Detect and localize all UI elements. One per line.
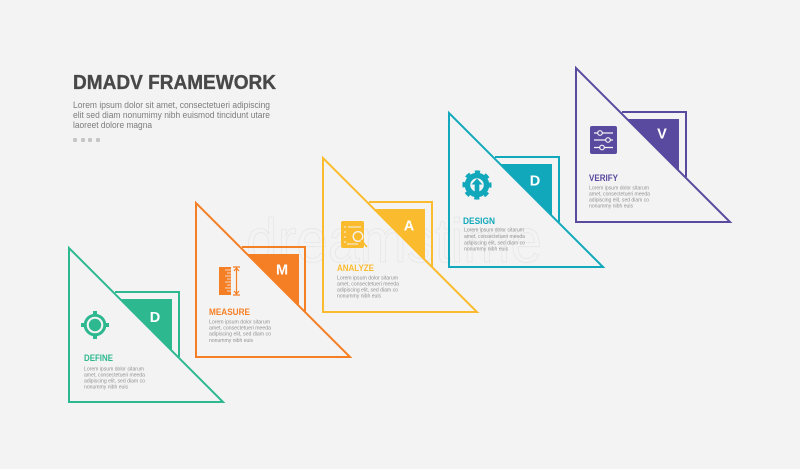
letter tab <box>374 209 425 260</box>
heading: DESIGN <box>463 216 495 226</box>
letter: D <box>150 310 160 326</box>
triangle outline <box>196 203 350 357</box>
body text: nonummy nibh euis <box>84 384 128 390</box>
triangle outline <box>323 158 477 312</box>
icon: gear with arrow <box>462 170 492 200</box>
heading: MEASURE <box>209 307 250 317</box>
letter: D <box>530 174 540 190</box>
pagination dots <box>73 138 100 142</box>
intro text: laoreet dolore magna <box>73 120 152 130</box>
body text <box>589 186 650 210</box>
heading: ANALYZE <box>337 263 374 273</box>
letter: V <box>657 126 667 142</box>
body text: amet, consectetueri meeda <box>84 372 145 378</box>
panel: verify <box>576 68 730 222</box>
icon: report with magnifier <box>341 221 367 248</box>
body text: amet, consectetueri meeda <box>209 326 271 332</box>
panel: define <box>69 248 223 402</box>
icon: ruler and arrow <box>219 267 240 295</box>
triangle outline <box>449 113 603 267</box>
body text: Lorem ipsum dolor sitarum <box>337 276 398 282</box>
body text: nonummy nibh euis <box>337 294 381 300</box>
body text: amet, consectetueri meeda <box>589 192 650 198</box>
watermark: dreamstime <box>246 207 542 276</box>
body text: nonummy nibh euis <box>209 338 253 344</box>
body text <box>464 228 525 252</box>
triangle outline <box>69 248 223 402</box>
body text: amet, consectetueri meeda <box>337 282 399 288</box>
back outline <box>622 112 686 177</box>
body text: adipiscing elit, sed diam co <box>464 240 525 246</box>
body text: nonummy nibh euis <box>589 204 633 210</box>
body text: Lorem ipsum dolor sitarum <box>589 186 649 192</box>
body text <box>84 366 145 390</box>
letter: M <box>276 262 288 278</box>
body text <box>209 320 271 344</box>
intro text: Lorem ipsum dolor sit amet, consectetueri adipiscing <box>73 100 270 110</box>
icon: target <box>81 311 109 339</box>
body text: adipiscing elit, sed diam co <box>209 332 271 338</box>
back outline <box>242 247 305 312</box>
back outline <box>369 202 432 267</box>
heading: VERIFY <box>589 173 618 183</box>
letter tab <box>627 119 679 171</box>
back outline <box>495 157 559 222</box>
panel: measure <box>196 203 350 357</box>
body text: nonummy nibh euis <box>464 246 508 252</box>
body text: adipiscing elit, sed diam co <box>589 198 649 204</box>
intro text: elit sed diam nonumimy nibh euismod tincidunt utare <box>73 110 270 120</box>
icon: sliders <box>590 126 617 154</box>
body text: adipiscing elit, sed diam co <box>84 378 145 384</box>
back outline <box>115 292 179 357</box>
triangle outline <box>576 68 730 222</box>
body text: amet, consectetueri meeda <box>464 234 525 240</box>
intro text <box>73 100 270 130</box>
title block <box>73 72 277 142</box>
body text: Lorem ipsum dolor sitarum <box>84 366 144 372</box>
letter tab <box>247 254 299 306</box>
body text: Lorem ipsum dolor sitarum <box>209 320 270 326</box>
letter tab <box>500 164 552 216</box>
panel: design <box>449 113 603 267</box>
letter: A <box>404 218 415 234</box>
letter tab <box>120 299 172 351</box>
panel: analyze <box>323 158 477 312</box>
title: DMADV FRAMEWORK <box>73 72 277 94</box>
body text <box>337 276 399 300</box>
heading: DEFINE <box>84 353 113 363</box>
body text: adipiscing elit, sed diam co <box>337 288 398 294</box>
body text: Lorem ipsum dolor sitarum <box>464 228 524 234</box>
